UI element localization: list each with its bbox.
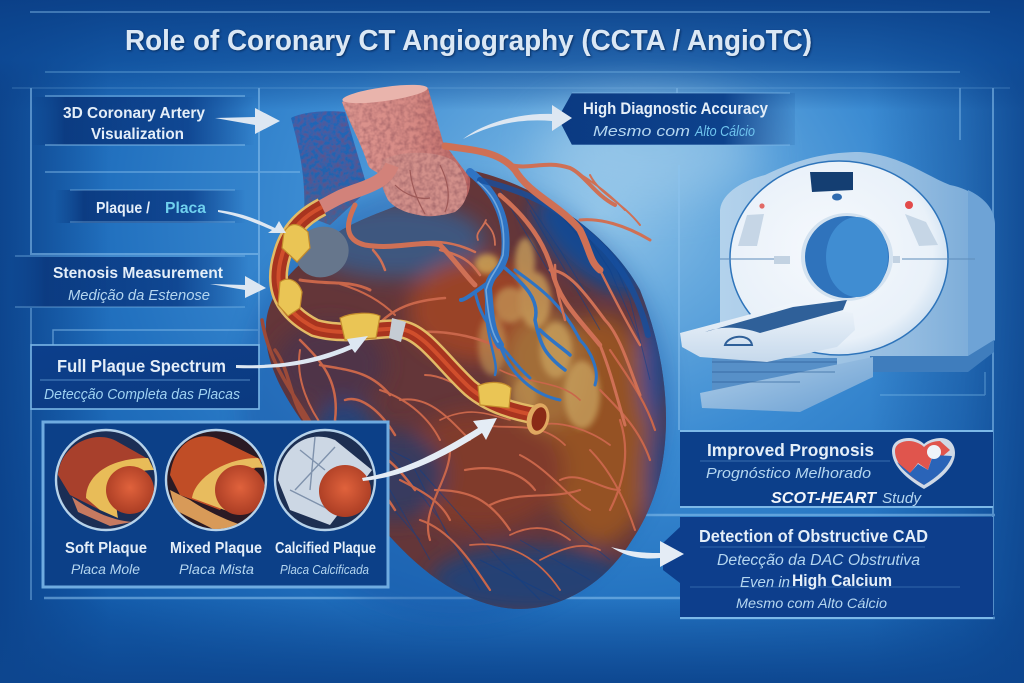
text: soft plaque: Soft Plaque (65, 540, 147, 557)
panel: improved prognosis: SCOT-HEART (771, 490, 877, 507)
banner: high diagnostic accuracy (558, 93, 795, 145)
panel: detection of obstructive CAD: Detecção da DAC Obstrutiva (717, 552, 920, 569)
panel: detection of obstructive CAD: Even in (740, 575, 790, 591)
text: mixed plaque (170, 540, 262, 577)
blue mesh (330, 190, 650, 600)
gantry ring (730, 161, 948, 355)
mottled texture (291, 182, 666, 608)
small red branches (299, 280, 655, 590)
artery opening (523, 401, 553, 437)
panel: detection of obstructive CAD: Detection of Obstructive CAD (699, 526, 928, 546)
stent band (389, 318, 406, 342)
panel: improved prognosis (680, 431, 993, 507)
label: full plaque spectrum: Full Plaque Spectrum (57, 356, 226, 376)
arrow: calcified plaque to artery (362, 418, 497, 481)
gantry bore (801, 213, 893, 301)
illustration: heart (240, 81, 690, 630)
panel: improved prognosis: Improved Prognosis (707, 440, 874, 460)
label: full plaque spectrum: Detecção Completa das Placas (44, 387, 240, 403)
panel: improved prognosis: Prognóstico Melhorado (706, 465, 871, 482)
label: stenosis: Medição da Estenose (68, 288, 210, 304)
label: 3D visualization (32, 96, 254, 145)
label: stenosis (10, 256, 248, 307)
fat deposits (475, 238, 600, 429)
heart muscle (266, 171, 666, 609)
icon: heart prognosis (892, 438, 955, 489)
blue veins (461, 172, 648, 400)
gantry housing (720, 152, 995, 372)
panel: plaque types (43, 422, 388, 587)
plaque deposits (278, 224, 511, 408)
exam table (712, 358, 837, 392)
label: full plaque spectrum (31, 345, 259, 409)
panel: improved prognosis: Study (882, 490, 923, 507)
red coronary branches (262, 146, 650, 440)
text: mixed plaque: Placa Mista (179, 562, 255, 577)
aorta (342, 86, 470, 216)
text: soft plaque: Placa Mole (71, 562, 140, 577)
text: calcified plaque: Placa Calcificada (280, 562, 369, 577)
left coronary artery with plaques (278, 165, 540, 416)
plaque: calcified (275, 430, 375, 530)
label: plaque: Plaque / (96, 200, 150, 217)
text: mixed plaque: Mixed Plaque (170, 540, 262, 557)
title: Role of Coronary CT Angiography (CCTA / AngioTC) (125, 25, 812, 57)
panel: detection of obstructive CAD: High Calcium (792, 572, 892, 590)
CT scanner (680, 152, 995, 412)
label: stenosis: Stenosis Measurement (53, 265, 224, 282)
arrow: stenosis (210, 276, 266, 298)
arrow: spectrum to artery (236, 336, 368, 368)
label: 3D visualization: Visualization (91, 126, 184, 143)
heart halo (240, 180, 670, 620)
text: calcified plaque: Calcified Plaque (275, 540, 376, 557)
arrow: to high accuracy (463, 105, 572, 139)
panel: detection of obstructive CAD (663, 517, 993, 618)
dark calcified patch (287, 218, 357, 286)
gantry base (870, 340, 994, 372)
arrow: to detection (611, 541, 684, 567)
aortic bulb (380, 153, 467, 216)
plaque: soft (56, 430, 156, 530)
arrow: plaque (218, 210, 286, 233)
banner: high diagnostic accuracy: Alto Cálcio (694, 124, 755, 140)
label: plaque (55, 190, 245, 223)
plaque: mixed (166, 430, 266, 530)
vena cava (291, 111, 368, 225)
panel: detection of obstructive CAD: Mesmo com Alto Cálcio (736, 595, 887, 611)
banner: high diagnostic accuracy: Mesmo com (593, 124, 690, 140)
arrow: visualization to heart (215, 108, 280, 134)
ct control display (720, 172, 975, 264)
label: 3D visualization: 3D Coronary Artery (63, 105, 205, 122)
label: plaque: Placa (165, 200, 206, 217)
text: calcified plaque (275, 540, 376, 577)
text: soft plaque (65, 540, 147, 577)
banner: high diagnostic accuracy: High Diagnostic Accuracy (583, 100, 769, 118)
